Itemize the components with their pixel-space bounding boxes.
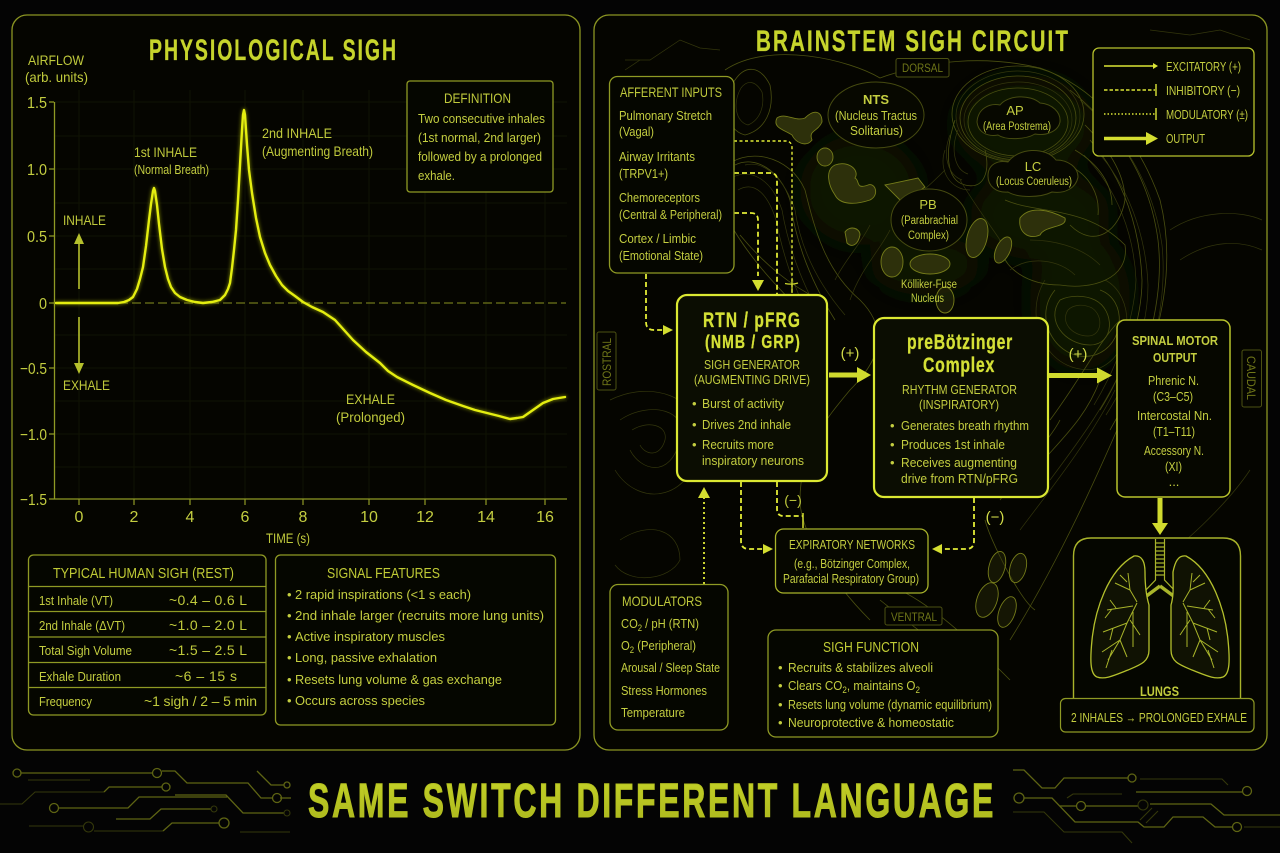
arrow: spinal output to lungs — [1152, 498, 1168, 535]
panel: signal features: • — [287, 672, 292, 687]
panel: modulators: 2 — [630, 645, 634, 655]
node: preBotzinger complex: Generates breath rhythm — [901, 418, 1029, 433]
panel: modulators: Arousal / Sleep State — [621, 660, 720, 675]
panel: afferent inputs: (TRPV1+) — [619, 166, 668, 181]
annotation: 1st inhale: 1st INHALE — [134, 144, 197, 160]
table: typical human sigh: ~1 sigh / 2 – 5 min — [144, 693, 257, 709]
node: spinal motor output: Phrenic N. — [1148, 373, 1199, 388]
brainstem line art backdrop — [610, 30, 1262, 690]
connection: preBotzinger to expiratory networks: (−) — [986, 509, 1004, 526]
panel: sigh function: 2 — [842, 685, 847, 695]
node: spinal motor output: (C3–C5) — [1153, 389, 1193, 404]
connection: RTN to expiratory networks — [741, 482, 773, 554]
y axis title: (arb. units) — [25, 69, 88, 85]
panel: signal features: Long, passive exhalation — [295, 650, 437, 665]
table: typical human sigh: ~1.0 – 2.0 L — [169, 617, 247, 633]
node: spinal motor output — [1117, 320, 1230, 497]
panel: signal features: • — [287, 650, 292, 665]
panel: sigh function: • — [778, 697, 783, 712]
connections: afferent inputs to RTN — [646, 141, 798, 335]
node: RTN / pFRG: SIGH GENERATOR — [704, 357, 800, 372]
panel: signal features: 2 rapid inspirations (<1 s each) — [295, 587, 471, 602]
node: preBotzinger complex: (INSPIRATORY) — [919, 397, 999, 412]
table: typical human sigh — [28, 555, 266, 715]
region label: Kolliker-Fuse: Kölliker-Fuse — [901, 279, 957, 291]
arrow: RTN to preBotzinger — [829, 345, 871, 383]
node: preBotzinger complex: drive from RTN/pFRG — [901, 471, 1018, 486]
annotation: 2nd inhale: 2nd INHALE — [262, 125, 332, 141]
table: typical human sigh: Frequency — [39, 694, 92, 709]
panel: signal features: SIGNAL FEATURES — [327, 566, 440, 582]
node: RTN / pFRG: • — [692, 396, 697, 411]
x axis tick labels — [75, 509, 554, 526]
right lung — [1171, 556, 1229, 678]
annotation: 1st inhale — [134, 144, 209, 177]
left lung — [1091, 556, 1149, 678]
connection: preBotzinger to expiratory networks — [932, 498, 1004, 554]
panel: modulators: MODULATORS — [622, 593, 702, 609]
panel: modulators — [610, 584, 728, 730]
annotation: 2nd inhale — [262, 125, 373, 159]
node: preBotzinger complex: • — [890, 437, 895, 452]
node: RTN / pFRG: Recruits more — [702, 437, 774, 452]
region label: PB: PB — [919, 197, 937, 212]
annotation: 2nd inhale: (Augmenting Breath) — [262, 143, 373, 159]
region label: Kolliker-Fuse: Nucleus — [911, 293, 944, 305]
table: typical human sigh: ~0.4 – 0.6 L — [169, 592, 247, 608]
panel: sigh function — [768, 630, 998, 737]
node: RTN / pFRG: Burst of activity — [702, 396, 784, 411]
x axis tick labels: 0 — [75, 509, 84, 526]
panel: modulators: Stress Hormones — [621, 683, 707, 698]
node: preBotzinger complex: Complex — [923, 354, 995, 377]
panel: sigh function: Resets lung volume (dynamic equilibrium) — [788, 697, 992, 712]
y axis tick labels: −1.0 — [20, 427, 47, 444]
node: preBotzinger complex: • — [890, 455, 895, 470]
panel: signal features — [276, 555, 556, 725]
region label: PB: (Parabrachial — [901, 215, 958, 227]
table: typical human sigh: TYPICAL HUMAN SIGH (REST) — [53, 566, 234, 582]
table: typical human sigh: 2nd Inhale (ΔVT) — [39, 618, 125, 633]
panel: afferent inputs: Cortex / Limbic — [619, 231, 696, 246]
panel: modulators: 2 — [638, 623, 642, 633]
arrow: inhale direction: INHALE — [63, 212, 106, 228]
x axis tick labels: 8 — [299, 509, 308, 526]
panel: sigh function: • — [778, 715, 783, 730]
node: spinal motor output: (T1–T11) — [1153, 424, 1195, 439]
y axis tick labels: 0.5 — [27, 229, 47, 246]
node: spinal motor output: Intercostal Nn. — [1137, 408, 1212, 423]
tag: dorsal: DORSAL — [902, 63, 944, 75]
node: spinal motor output: SPINAL MOTOR — [1132, 333, 1219, 348]
panel: afferent inputs: Airway Irritants — [619, 149, 695, 164]
table: typical human sigh: ~1.5 – 2.5 L — [169, 642, 247, 658]
region label: LC: LC — [1025, 159, 1041, 174]
region label: AP: (Area Postrema) — [983, 121, 1051, 133]
arrow: preBotzinger to spinal output: (+) — [1069, 346, 1087, 363]
tag: rostral — [597, 332, 616, 390]
title: physiological sigh: PHYSIOLOGICAL SIGH — [149, 34, 398, 67]
panel: afferent inputs — [610, 76, 734, 273]
legend: excitatory — [1104, 59, 1241, 74]
region label: NTS — [828, 82, 924, 148]
trachea — [1137, 539, 1183, 603]
panel: physiological sigh — [12, 15, 580, 750]
legend — [1093, 48, 1254, 156]
table: typical human sigh: Total Sigh Volume — [39, 643, 132, 658]
region label: AP: AP — [1006, 103, 1024, 118]
node: expiratory networks — [776, 529, 928, 593]
decoration: right circuit traces — [1013, 770, 1280, 843]
panel: modulators: / pH (RTN) — [642, 616, 699, 631]
arrow: exhale direction — [63, 317, 110, 393]
panel: modulators: O — [621, 638, 631, 653]
annotation: exhale prolonged: EXHALE — [346, 391, 395, 407]
callout: definition: DEFINITION — [444, 90, 511, 106]
node: expiratory networks: (e.g., Bötzinger Complex, — [794, 556, 910, 571]
arrow: preBotzinger to spinal output — [1049, 346, 1112, 384]
x axis title: TIME (s) — [266, 530, 310, 546]
x axis tick labels: 2 — [130, 509, 139, 526]
icon: lungs — [1091, 539, 1229, 678]
table: typical human sigh: ~6 – 15 s — [175, 668, 237, 684]
panel: sigh function: SIGH FUNCTION — [823, 640, 919, 656]
callout: definition: Two consecutive inhales — [418, 111, 545, 126]
node: RTN / pFRG: (NMB / GRP) — [705, 331, 801, 352]
panel: sigh function: Clears CO — [788, 678, 849, 693]
panel: sigh function: Neuroprotective & homeostatic — [788, 715, 954, 730]
region label: NTS: NTS — [863, 92, 889, 107]
y axis tick labels: 0 — [39, 296, 47, 313]
region label: PB: Complex) — [908, 230, 949, 242]
panel: modulators: Temperature — [621, 705, 685, 720]
panel: afferent inputs: Chemoreceptors — [619, 190, 700, 205]
y axis tick labels — [20, 95, 47, 509]
panel: sigh function: • — [778, 678, 783, 693]
callout: two inhales to prolonged exhale — [1060, 698, 1254, 732]
legend: output: OUTPUT — [1166, 131, 1205, 146]
tag: caudal — [1242, 350, 1262, 407]
arrow: RTN to preBotzinger: (+) — [841, 345, 859, 362]
panel: sigh function: Recruits & stabilizes alveoli — [788, 660, 933, 675]
panel: modulators: (Peripheral) — [634, 638, 696, 653]
panel: signal features: • — [287, 693, 292, 708]
legend: inhibitory: INHIBITORY (−) — [1166, 83, 1240, 98]
x axis tick labels: 12 — [416, 509, 434, 526]
tag: ventral — [885, 607, 942, 625]
legend: modulatory: MODULATORY (±) — [1166, 107, 1248, 122]
region label: PB — [891, 189, 967, 251]
connection: RTN inhibits expiratory networks — [777, 482, 803, 528]
panel: afferent inputs: (Emotional State) — [619, 248, 703, 263]
x axis tick labels: 4 — [186, 509, 195, 526]
annotation: 1st inhale: (Normal Breath) — [134, 162, 209, 177]
tag: ventral: VENTRAL — [891, 612, 938, 624]
x axis tick labels: 10 — [360, 509, 378, 526]
node: RTN / pFRG: Drives 2nd inhale — [702, 417, 791, 432]
region label: LC: (Locus Coeruleus) — [996, 176, 1072, 188]
panel: signal features: • — [287, 629, 292, 644]
panel: signal features: Resets lung volume & gas exchange — [295, 672, 502, 687]
panel: afferent inputs: (Central & Peripheral) — [619, 207, 722, 222]
callout: definition: exhale. — [418, 168, 455, 183]
y axis title: AIRFLOW — [28, 52, 85, 68]
y axis tick labels: −1.5 — [20, 492, 47, 509]
tag: caudal: CAUDAL — [1244, 356, 1256, 401]
region label: NTS: (Nucleus Tractus — [835, 108, 917, 123]
tag: dorsal — [896, 58, 949, 77]
title: brainstem sigh circuit: BRAINSTEM SIGH CIRCUIT — [756, 25, 1070, 58]
panel: signal features: • — [287, 587, 292, 602]
panel: sigh function: , maintains O — [847, 678, 916, 693]
panel: signal features: • — [287, 608, 292, 623]
callout: definition: followed by a prolonged — [418, 149, 542, 164]
y axis title — [25, 52, 88, 85]
node: preBotzinger complex: Receives augmenting — [901, 455, 1017, 470]
connection: RTN inhibits expiratory networks: (−) — [784, 492, 802, 508]
arrow: exhale direction: EXHALE — [63, 377, 110, 393]
panel: sigh function: • — [778, 660, 783, 675]
node: RTN / pFRG — [677, 295, 827, 481]
node: RTN / pFRG: • — [692, 437, 697, 452]
table: typical human sigh: Exhale Duration — [39, 669, 121, 684]
node: preBotzinger complex — [874, 318, 1048, 497]
panel: afferent inputs: (Vagal) — [619, 124, 654, 139]
node: spinal motor output: OUTPUT — [1153, 350, 1197, 365]
panel: signal features: Occurs across species — [295, 693, 425, 708]
region label: LC — [988, 150, 1078, 196]
region label: NTS: Solitarius) — [850, 123, 903, 138]
panel: modulators: CO — [621, 616, 640, 631]
legend: excitatory: EXCITATORY (+) — [1166, 59, 1241, 74]
panel: lungs — [1074, 538, 1240, 700]
node: RTN / pFRG: RTN / pFRG — [703, 309, 801, 332]
y axis tick labels: 1.0 — [27, 162, 47, 179]
node: RTN / pFRG: (AUGMENTING DRIVE) — [694, 372, 810, 387]
region label: AP — [977, 97, 1060, 139]
node: spinal motor output: ... — [1169, 474, 1179, 489]
node: spinal motor output: Accessory N. — [1144, 443, 1204, 458]
annotation: exhale prolonged — [336, 391, 405, 425]
region label: Kolliker-Fuse — [901, 279, 957, 305]
legend: output — [1104, 131, 1205, 146]
x axis tick labels: 6 — [241, 509, 250, 526]
label: lungs: LUNGS — [1140, 683, 1179, 699]
x axis tick labels: 14 — [477, 509, 495, 526]
connection: modulators to RTN — [698, 487, 710, 584]
x axis tick labels: 16 — [536, 509, 554, 526]
node: preBotzinger complex: preBötzinger — [907, 331, 1013, 354]
annotation: exhale prolonged: (Prolonged) — [336, 409, 405, 425]
panel: signal features: 2nd inhale larger (recruits more lung units) — [295, 608, 544, 623]
node: expiratory networks: EXPIRATORY NETWORKS — [789, 537, 915, 552]
node: RTN / pFRG: • — [692, 417, 697, 432]
panel: afferent inputs: AFFERENT INPUTS — [620, 84, 722, 100]
table: typical human sigh: 1st Inhale (VT) — [39, 593, 113, 608]
arrow: inhale direction — [63, 212, 106, 289]
node: expiratory networks: Parafacial Respiratory Group) — [783, 571, 919, 586]
node: preBotzinger complex: Produces 1st inhale — [901, 437, 1005, 452]
panel: brainstem sigh circuit — [594, 15, 1267, 750]
panel: sigh function: 2 — [916, 685, 920, 695]
tag: rostral: ROSTRAL — [602, 337, 614, 386]
chart: airflow over time — [20, 52, 567, 546]
sigh airflow trace — [56, 110, 565, 419]
y axis tick labels: −0.5 — [20, 361, 47, 378]
legend: inhibitory — [1104, 83, 1240, 98]
y axis tick labels: 1.5 — [27, 95, 47, 112]
node: preBotzinger complex: • — [890, 418, 895, 433]
decoration: left circuit traces — [0, 768, 291, 832]
panel: afferent inputs: Pulmonary Stretch — [619, 108, 712, 123]
callout: definition: (1st normal, 2nd larger) — [418, 130, 541, 145]
panel: signal features: Active inspiratory muscles — [295, 629, 445, 644]
callout: definition — [407, 81, 553, 192]
node: RTN / pFRG: inspiratory neurons — [702, 453, 804, 468]
node: preBotzinger complex: RHYTHM GENERATOR — [902, 382, 1017, 397]
node: spinal motor output: (XI) — [1165, 459, 1182, 474]
